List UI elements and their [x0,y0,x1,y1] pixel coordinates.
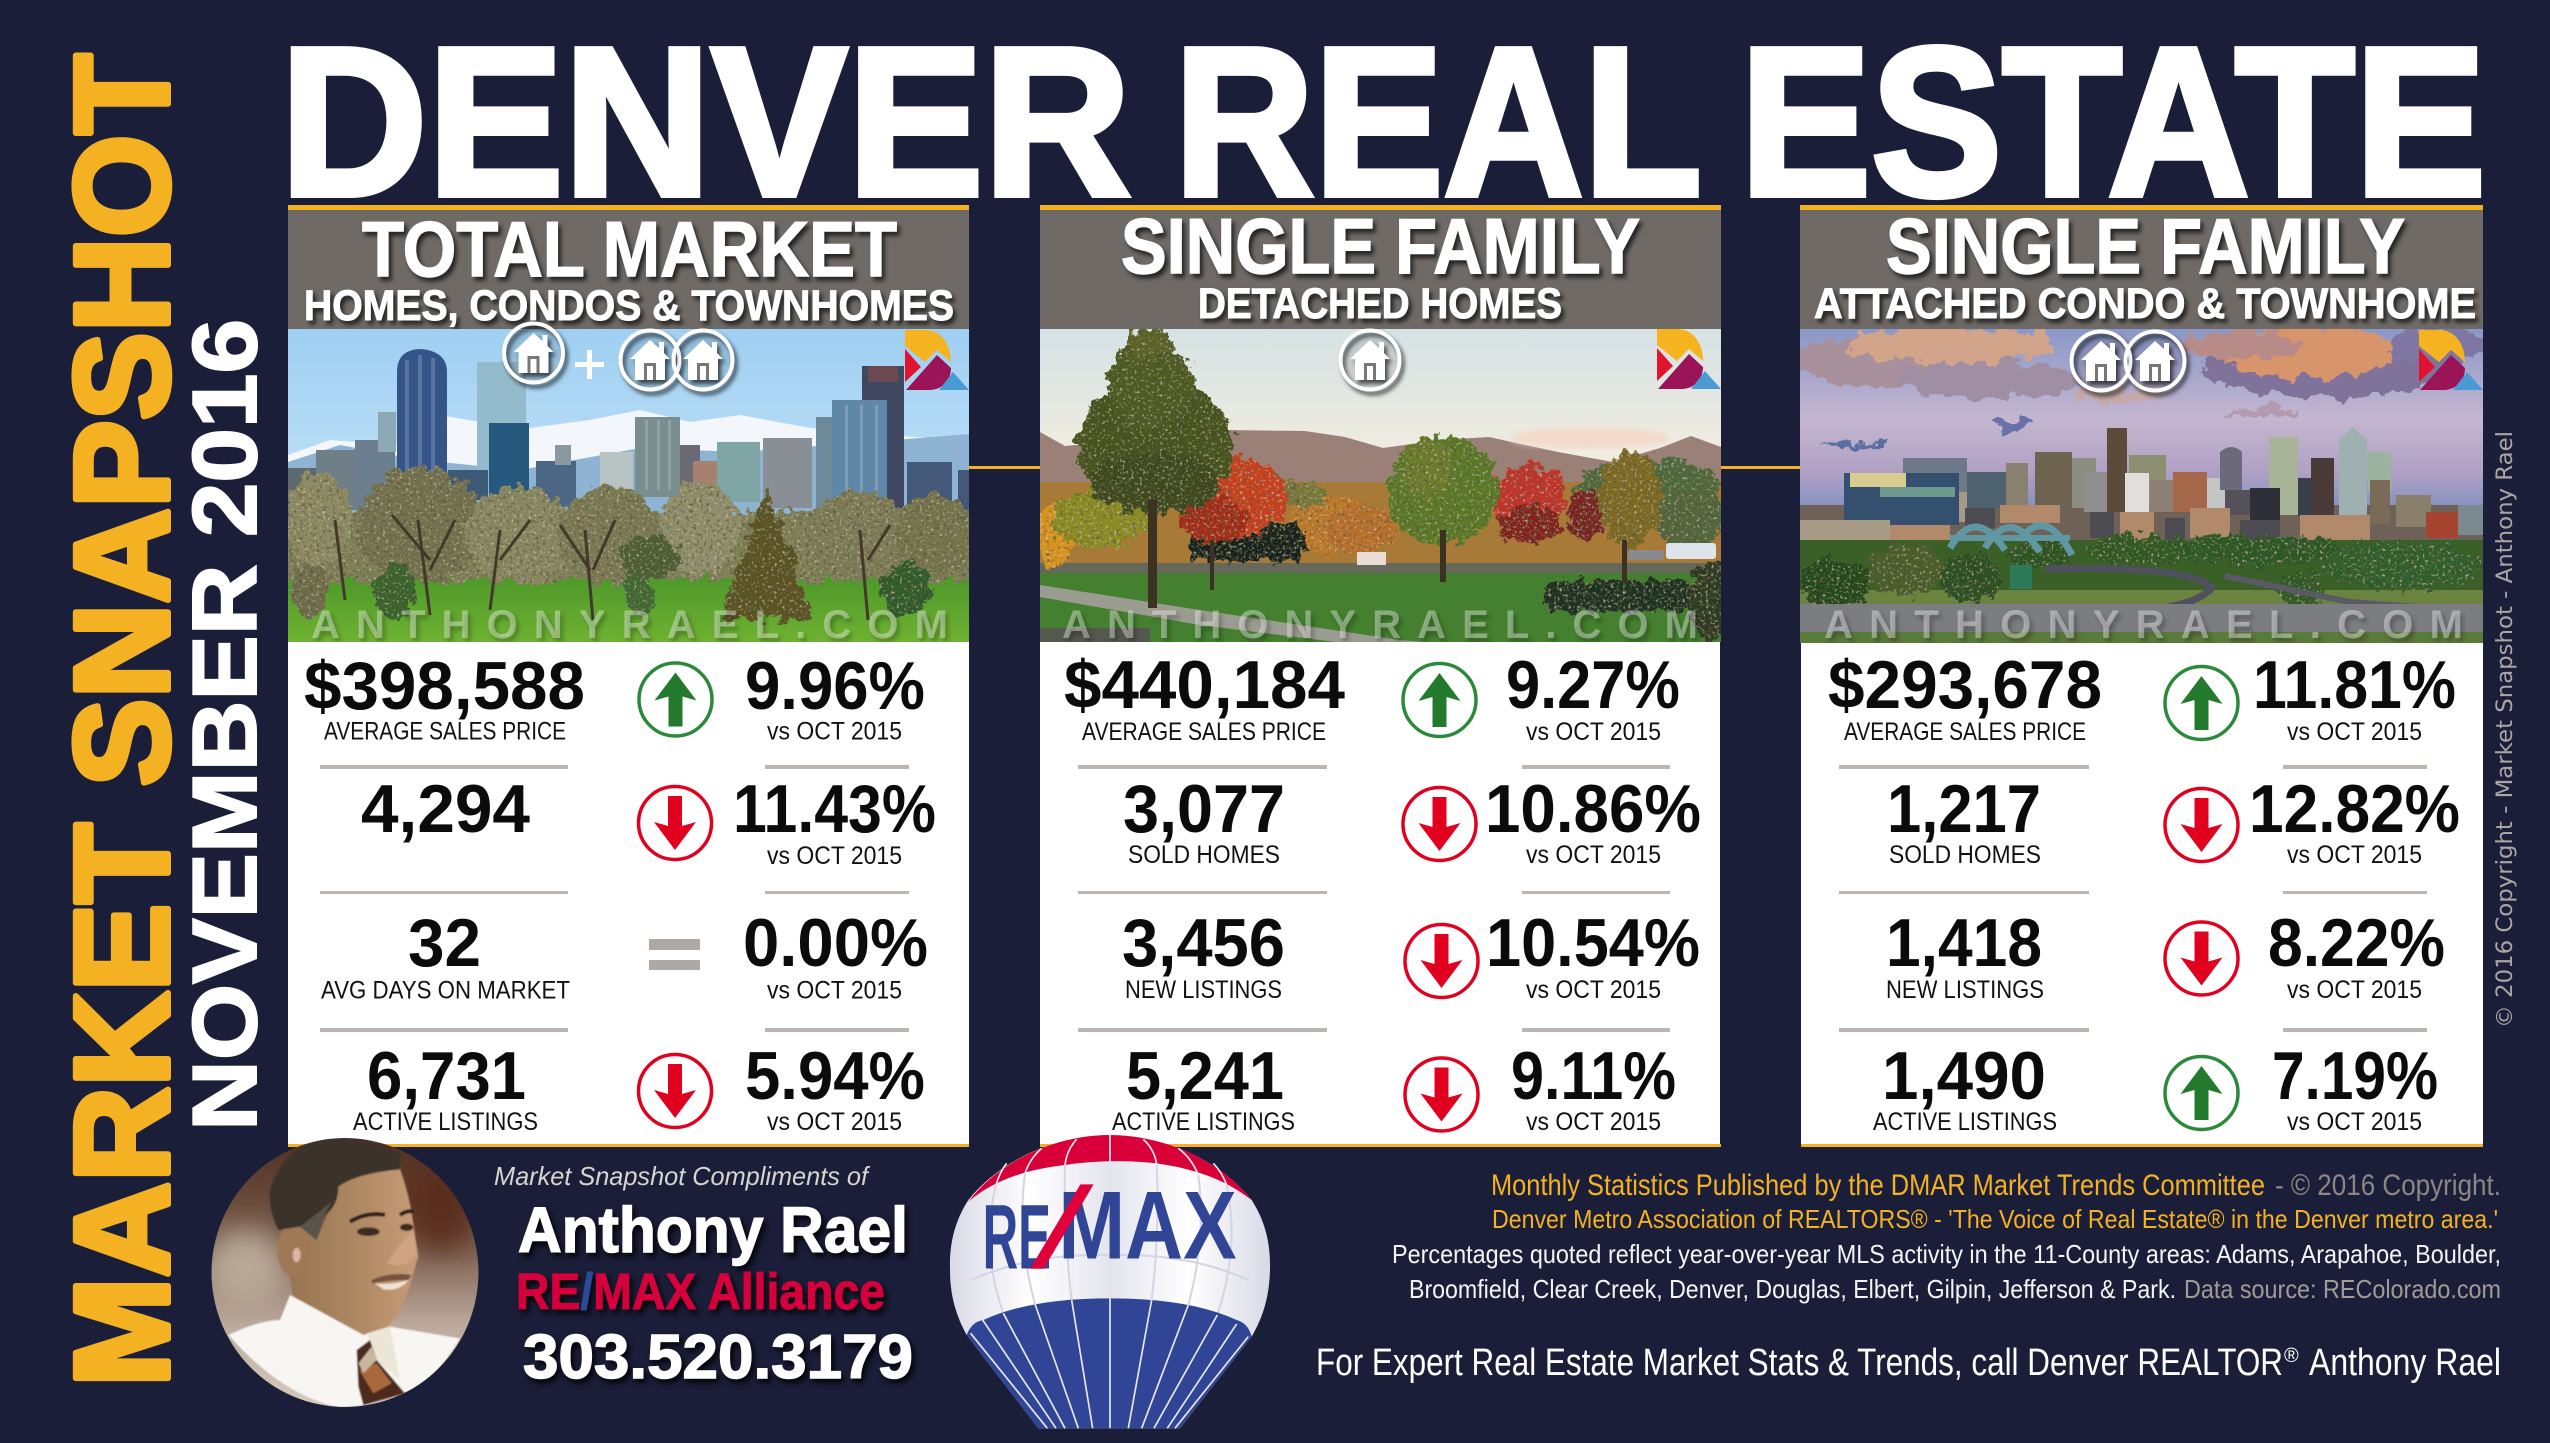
stat row: new listings: vs OCT 2015 [2287,976,2422,1004]
brokerage name: RE/MAX Alliance [516,1263,885,1320]
stat row: sold homes: 10.86% [1485,771,1701,847]
stat row: new listings: 1,418 [1886,905,2042,981]
stat row: active listings: ACTIVE LISTINGS [353,1108,538,1136]
panel: total market [280,205,980,1147]
stat row: average sales price: 11.81% [2253,647,2456,723]
source text block: Monthly Statistics Published by the DMAR Market Trends Committee [1491,1169,2265,1202]
stat row: average sales price: AVERAGE SALES PRICE [324,718,566,746]
icon: single family house [1340,330,1400,390]
stat row: average sales price: 9.27% [1506,647,1680,723]
stat row: sold homes [1887,771,2460,869]
stat row: average sales price: AVERAGE SALES PRICE [1844,718,2086,746]
closing call to action: ® [2284,1345,2299,1367]
icon: attached houses [620,330,732,390]
plus sign [575,350,604,379]
stat row: active listings: 5,241 [1126,1038,1284,1114]
icon: RE/MAX balloon: MAX [1058,1172,1237,1279]
panel header: detached homes: DETACHED HOMES [1198,280,1562,328]
stat row: active listings: 6,731 [367,1038,526,1114]
source text block: Data source: REColorado.com [2184,1274,2501,1304]
stat row: average sales price: vs OCT 2015 [1526,718,1661,746]
stat row: sold homes: 11.43% [733,771,936,847]
connector line left [969,466,1040,469]
closing call to action: For Expert Real Estate Market Stats & Trends, call Denver REALTOR [1316,1342,2283,1384]
stat row: active listings [353,1038,925,1136]
photo: denver skyline at dusk: ANTHONYRAEL.COM [1824,603,2463,647]
stat row: new listings: vs OCT 2015 [1526,976,1661,1004]
stat row: new listings: NEW LISTINGS [1125,976,1282,1004]
icon: single family house [504,324,563,382]
stat row: average sales price [1828,647,2456,746]
stat row: sold homes: SOLD HOMES [1128,841,1280,869]
closing call to action: Anthony Rael [2309,1342,2501,1384]
stat row: active listings: vs OCT 2015 [2287,1108,2422,1136]
stat row: sold homes: 1,217 [1887,771,2041,847]
stat row: active listings: vs OCT 2015 [767,1108,902,1136]
stat row: sold homes [1123,771,1701,869]
connector line right [1721,466,1800,469]
stat row: sold homes: vs OCT 2015 [2287,841,2422,869]
icon: DMAR logo [1657,329,1721,389]
stat row: active listings: 5.94% [745,1038,925,1114]
vertical heading: november 2016: NOVEMBER 2016 [175,319,276,1131]
icon: DMAR logo [2419,330,2483,390]
stat row: active listings: 9.11% [1511,1038,1676,1114]
stat row: avg days on market [321,905,928,1004]
stat row: average sales price: $440,184 [1064,647,1345,723]
stat row: active listings: 7.19% [2272,1038,2438,1114]
stat row: sold homes: vs OCT 2015 [1526,841,1661,869]
panel: single family detached [1033,202,1730,1147]
stat row: avg days on market: 0.00% [743,905,928,981]
vertical heading: market snapshot: MARKET SNAPSHOT [48,54,197,1387]
panel header: attached condo and townhome: ATTACHED CONDO & TOWNHOME [1814,280,2476,328]
title: ESTATE [1740,3,2486,240]
source text block [1392,1169,2501,1304]
photo: denver skyline with park: ANTHONYRAEL.COM [311,603,948,647]
stat row: average sales price [1064,647,1680,746]
title: DENVER [280,3,1131,240]
panel header: total market: HOMES, CONDOS & TOWNHOMES [304,282,954,330]
agent name: Anthony Rael [518,1194,908,1266]
photo: autumn park with mountains: ANTHONYRAEL.COM [1062,603,1698,647]
stat row: avg days on market: vs OCT 2015 [767,976,902,1004]
stat row: average sales price: vs OCT 2015 [2287,718,2422,746]
stat row: avg days on market: 32 [408,905,481,981]
stat row: new listings [1886,905,2445,1004]
stat row: active listings [1873,1038,2438,1136]
photo: denver skyline at dusk [1790,326,2490,647]
stat row: avg days on market: AVG DAYS ON MARKET [321,976,570,1004]
icon: RE/MAX balloon [950,1135,1270,1428]
stat row: sold homes: 3,077 [1123,771,1285,847]
vertical copyright note: © 2016 Copyright - Market Snapshot - Anthony Rael [2493,431,2518,1028]
panel header: detached homes [1040,202,1721,329]
stat row: sold homes [361,771,936,870]
icon: RE/MAX balloon: RE [983,1186,1051,1288]
sponsor line: Market Snapshot Compliments of [494,1161,871,1191]
stat row: new listings [1122,905,1700,1004]
panel header: attached condo and townhome [1800,202,2483,329]
icon: RE/MAX balloon: / [1020,1164,1103,1291]
stat row: sold homes: 12.82% [2249,771,2460,847]
stat row: new listings: NEW LISTINGS [1886,976,2044,1004]
title [280,3,2486,240]
title: REAL [1174,3,1702,240]
panel header: detached homes: SINGLE FAMILY [1121,202,1640,290]
stat row: new listings: 10.54% [1486,905,1700,981]
photo: denver skyline with park [280,329,980,647]
stat row: average sales price: AVERAGE SALES PRICE [1082,718,1326,746]
stat row: average sales price: $293,678 [1828,647,2102,723]
phone number: 303.520.3179 [523,1323,913,1392]
stat row: sold homes: 4,294 [361,771,530,847]
panel: single family attached [1790,202,2490,1147]
photo: autumn park with mountains [1033,327,1730,650]
stat row: active listings: ACTIVE LISTINGS [1873,1108,2057,1136]
stat row: sold homes: vs OCT 2015 [767,842,902,870]
stat row: active listings [1112,1038,1676,1136]
stat row: average sales price [304,648,925,746]
icon: attached houses [2072,332,2184,390]
icon: DMAR logo [905,330,969,390]
stat row: active listings: 1,490 [1882,1038,2046,1114]
stat row: active listings: vs OCT 2015 [1526,1108,1661,1136]
stat row: sold homes: SOLD HOMES [1889,841,2041,869]
stat row: average sales price: 9.96% [745,648,925,724]
source text block: - © 2016 Copyright. [2275,1169,2501,1202]
panel header: total market: TOTAL MARKET [362,205,897,293]
stat row: new listings: 3,456 [1122,905,1285,981]
panel header: attached condo and townhome: SINGLE FAMILY [1886,202,2405,290]
panel header: total market [288,205,969,330]
stat row: average sales price: vs OCT 2015 [767,718,902,746]
stat row: average sales price: $398,588 [304,648,585,724]
source text block: Broomfield, Clear Creek, Denver, Douglas, Elbert, Gilpin, Jefferson & Park. [1409,1274,2176,1304]
stat row: new listings: 8.22% [2268,905,2445,981]
portrait: Anthony Rael [205,1138,480,1407]
stat row: active listings: ACTIVE LISTINGS [1112,1108,1295,1136]
